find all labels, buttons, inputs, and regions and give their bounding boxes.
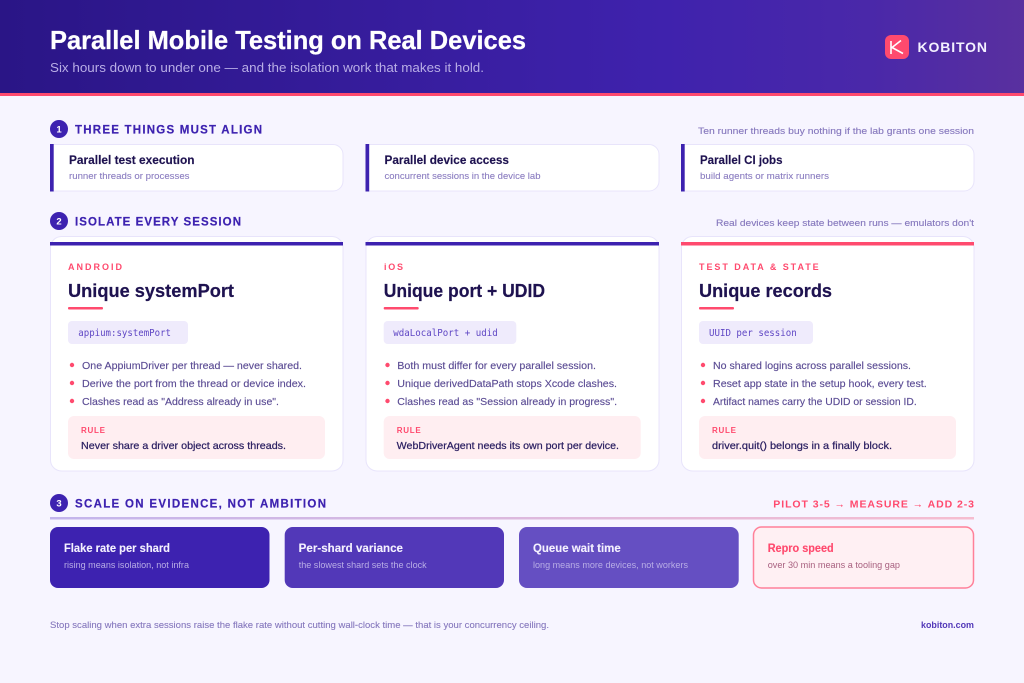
title: Parallel Mobile Testing on Real Devices — [50, 25, 526, 55]
section 1 note: Ten runner threads buy nothing if the lab grants one session — [698, 126, 974, 137]
panel: iOS: Unique derivedDataPath stops Xcode clashes. — [397, 378, 617, 390]
card: parallel device access: concurrent sessions in the device lab — [384, 171, 540, 182]
section 2 heading: ISOLATE EVERY SESSION — [75, 216, 241, 228]
card: parallel device access — [366, 144, 659, 192]
metric: repro speed — [754, 527, 974, 588]
section 1 heading: THREE THINGS MUST ALIGN — [75, 124, 262, 136]
panel: android — [50, 236, 343, 471]
section 1 heading — [50, 120, 262, 138]
subtitle: Six hours down to under one — and the isolation work that makes it hold. — [50, 60, 484, 75]
panel: test data and state: Reset app state in the setup hook, every test. — [713, 378, 927, 390]
panel: test data and state: No shared logins across parallel sessions. — [713, 360, 911, 372]
panel: iOS: Both must differ for every parallel session. — [397, 360, 596, 372]
metric: variance: the slowest shard sets the clock — [299, 560, 427, 571]
header banner — [0, 0, 1024, 96]
panel: android: Derive the port from the thread or device index. — [82, 378, 306, 390]
section 2 heading — [50, 212, 241, 230]
card: parallel CI jobs: build agents or matrix runners — [700, 171, 829, 182]
metric: flake rate: rising means isolation, not infra — [64, 560, 190, 571]
panel: android: ANDROID — [68, 262, 122, 272]
panel: test data and state: Unique records — [699, 281, 832, 301]
metric: queue wait — [519, 527, 739, 588]
panel: android: Unique systemPort — [68, 281, 234, 301]
card: parallel test execution: runner threads or processes — [69, 171, 190, 182]
logo — [885, 35, 987, 59]
panel: iOS: Unique port + UDID — [384, 281, 545, 301]
metric: flake rate: Flake rate per shard — [64, 543, 170, 555]
logo: KOBITON — [918, 39, 987, 55]
card: parallel CI jobs: Parallel CI jobs — [700, 153, 783, 167]
section 3 sequence note: PILOT 3-5 → MEASURE → ADD 2-3 — [773, 499, 974, 511]
panel: android: Never share a driver object across threads. — [81, 440, 286, 452]
card: parallel test execution — [50, 144, 343, 192]
section 2 heading: 2 — [56, 216, 62, 228]
panel: android: RULE — [81, 426, 106, 435]
section 3 heading — [50, 494, 326, 512]
panel: test data and state: driver.quit() belongs in a finally block. — [712, 440, 892, 452]
card: parallel test execution: Parallel test execution — [69, 153, 194, 167]
footer note: Stop scaling when extra sessions raise the flake rate without cutting wall-clock time — that is your concurrency ceiling. — [50, 620, 549, 631]
card: parallel CI jobs — [681, 144, 974, 192]
panel: iOS: RULE — [397, 426, 421, 435]
panel: test data and state: RULE — [712, 426, 737, 435]
metric: repro speed: over 30 min means a tooling gap — [768, 560, 900, 571]
panel: test data and state — [681, 236, 974, 471]
card: parallel device access: Parallel device access — [384, 153, 509, 167]
metric: repro speed: Repro speed — [768, 543, 834, 555]
metric: variance: Per-shard variance — [299, 543, 403, 555]
panel: iOS — [366, 236, 659, 471]
section 3 heading: 3 — [56, 498, 62, 510]
metric: variance — [285, 527, 504, 588]
footer link: kobiton.com — [921, 620, 974, 631]
panel: android: appium:systemPort — [78, 328, 171, 339]
metric: queue wait: Queue wait time — [533, 543, 621, 555]
metric: queue wait: long means more devices, not workers — [533, 560, 688, 571]
panel: test data and state: TEST DATA & STATE — [699, 262, 819, 272]
section 3 heading: SCALE ON EVIDENCE, NOT AMBITION — [75, 499, 326, 511]
section 2 note: Real devices keep state between runs — emulators don't — [716, 218, 974, 229]
panel: iOS: WebDriverAgent needs its own port per device. — [397, 440, 619, 452]
panel: android: Clashes read as "Address already in use". — [82, 396, 279, 408]
panel: test data and state: Artifact names carry the UDID or session ID. — [713, 396, 917, 408]
metric: flake rate — [50, 527, 270, 588]
panel: iOS: wdaLocalPort + udid — [393, 328, 498, 339]
panel: test data and state: UUID per session — [709, 328, 797, 339]
panel: iOS: Clashes read as "Session already in progress". — [397, 396, 617, 408]
panel: android: One AppiumDriver per thread — never shared. — [82, 360, 302, 372]
panel: iOS: iOS — [384, 262, 403, 272]
section 1 heading: 1 — [56, 124, 62, 136]
